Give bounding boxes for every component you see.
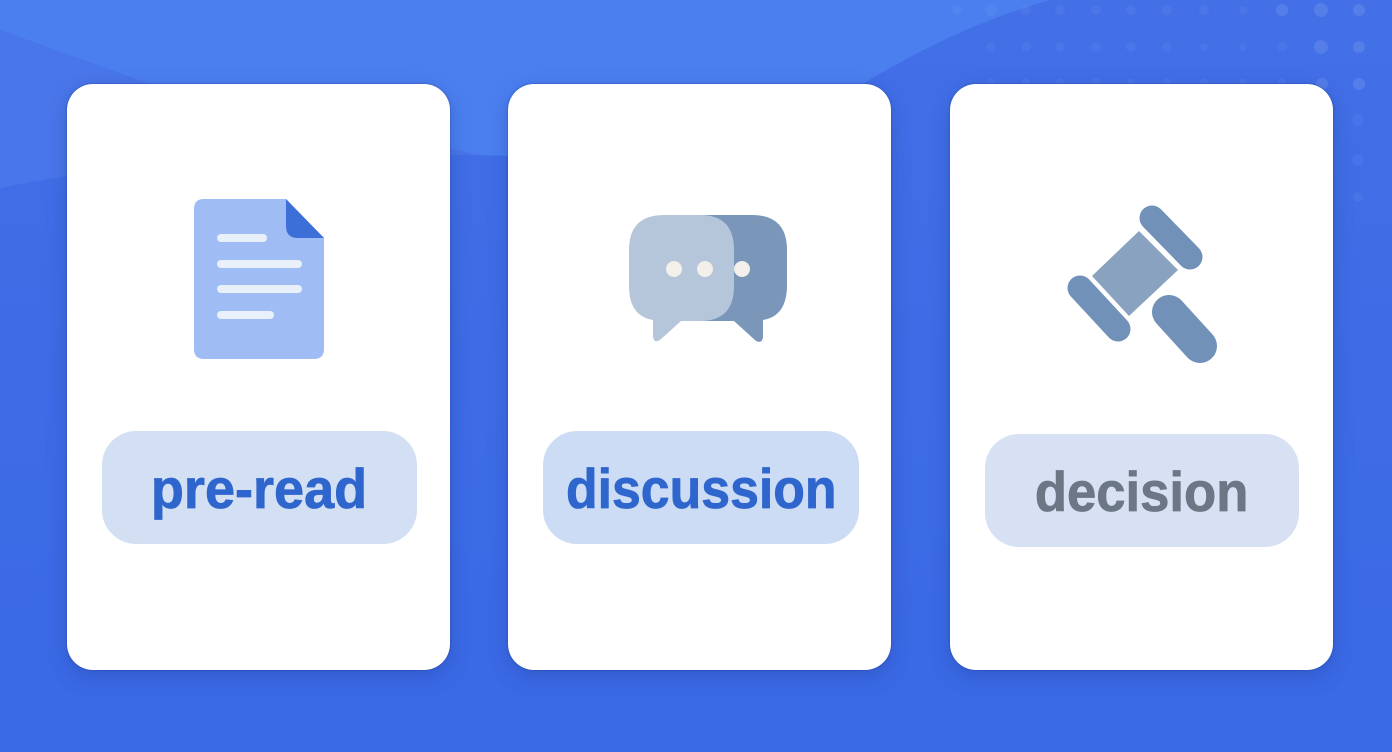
label: discussion	[543, 431, 859, 544]
label: pre-read	[102, 431, 417, 544]
icon: document	[194, 199, 324, 359]
panel: discussion card	[508, 84, 891, 670]
icon: speech bubbles	[629, 215, 787, 342]
panel: pre-read card	[67, 84, 450, 670]
icon: gavel	[1068, 206, 1217, 363]
label: discussion: discussion	[566, 457, 836, 520]
label: decision	[985, 434, 1299, 547]
panel: decision card	[950, 84, 1333, 670]
label: decision: decision	[1035, 460, 1249, 523]
label: pre-read: pre-read	[151, 457, 368, 520]
